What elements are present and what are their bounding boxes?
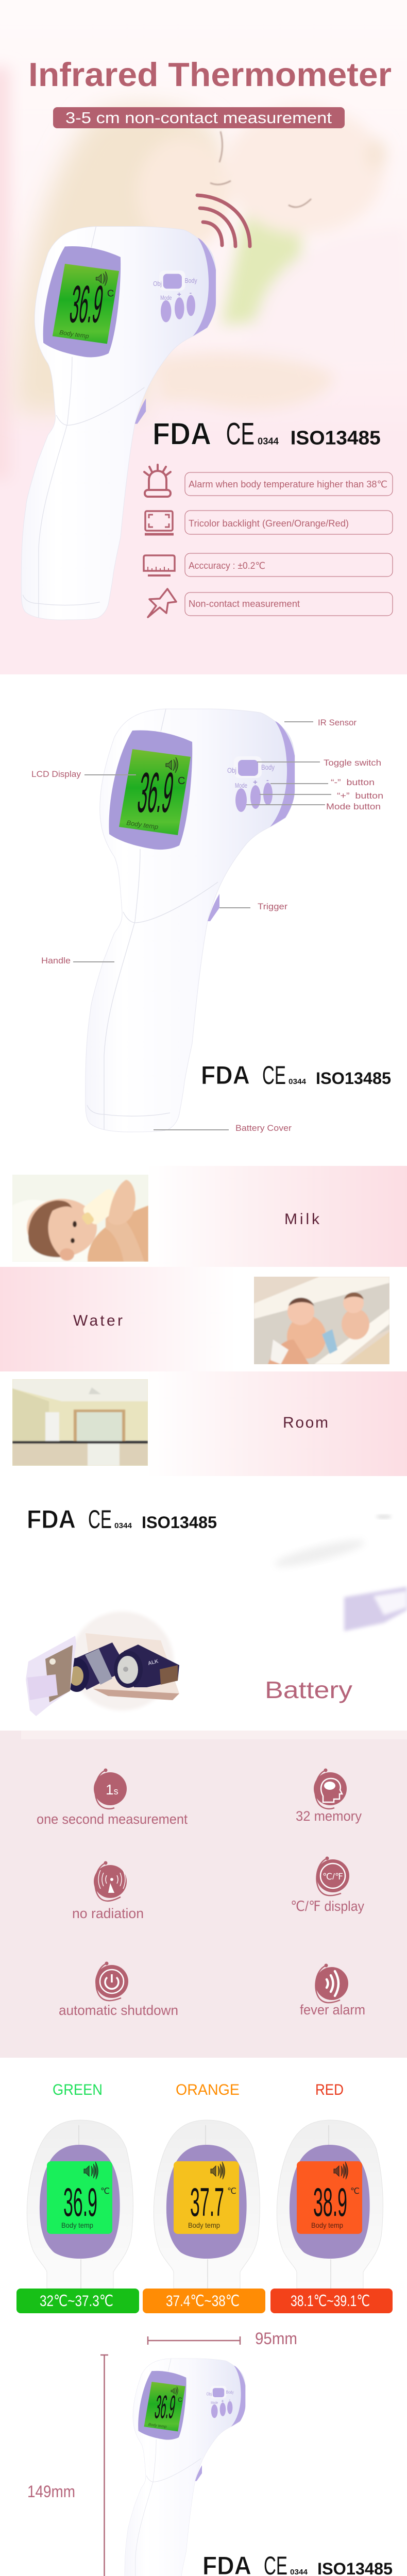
- certification logos: battery: FDA: [27, 1505, 76, 1534]
- panel: sample bands: [0, 1166, 407, 1476]
- label: Water: Water: [73, 1312, 123, 1329]
- thermometer: hero: +: [177, 290, 181, 298]
- range bar: red: 38.1℃~39.1℃: [291, 2293, 370, 2310]
- range bar: green: [16, 2289, 139, 2313]
- feature: non-contact: Non-contact measurement: [189, 599, 300, 609]
- photo: baby with bottle: [12, 1175, 148, 1262]
- range bar: orange: [143, 2289, 265, 2313]
- heading: GREEN: GREEN: [53, 2081, 103, 2098]
- feature: backlight: [185, 511, 393, 534]
- feature: no radiation: no radiation: [72, 1906, 144, 1921]
- icon: power: [95, 1962, 128, 2001]
- thermometer: orange screen: 37.7: [190, 2179, 224, 2225]
- battery: right: [114, 1645, 179, 1688]
- feature: automatic shutdown: automatic shutdown: [59, 2003, 178, 2018]
- label: LCD Display: LCD Display: [31, 769, 81, 779]
- thermometer: green screen: [27, 2120, 133, 2289]
- thermometer: main: Body: [261, 763, 275, 771]
- icon: unit toggle: [316, 1857, 349, 1895]
- certification logos: main: [201, 1061, 391, 1090]
- heading: ORANGE: ORANGE: [176, 2081, 240, 2098]
- dimension: 95mm: 95mm: [255, 2329, 297, 2348]
- feature: no radiation: [72, 1861, 144, 1921]
- thermometer: main: -: [266, 776, 269, 784]
- certification logos: battery: ISO13485: [142, 1513, 217, 1532]
- dimension: 95mm: [148, 2329, 297, 2348]
- thermometer: main: C: [178, 775, 185, 787]
- certification logos: dimensions: [202, 2551, 393, 2576]
- icon: radiation tower: [94, 1861, 127, 1901]
- thermometer: dimension view: 36.9: [153, 2388, 178, 2425]
- icon: pin: [148, 589, 176, 617]
- thermometer: main: Mode: [235, 782, 247, 789]
- thermometer: hero: Body temp: [59, 329, 90, 340]
- range bar: red: [270, 2289, 393, 2313]
- feature: automatic shutdown: [59, 1962, 178, 2018]
- thermometer: hero: Obj: [153, 280, 162, 287]
- thermometer: green screen: Body temp: [61, 2221, 93, 2229]
- feature: accuracy: Acccuracy : ±0.2℃: [189, 561, 265, 571]
- label: Milk: Milk: [284, 1211, 320, 1228]
- panel: room: [0, 1371, 407, 1476]
- subtitle pill: [53, 107, 345, 128]
- icon: alarm: [144, 465, 171, 497]
- thermometer: dimension view: Body temp: [148, 2422, 167, 2429]
- icon: 1s: 1s: [106, 1782, 118, 1798]
- feature: accuracy: [185, 553, 393, 577]
- label: IR Sensor: IR Sensor: [318, 718, 357, 727]
- certification logos: battery: 0344: [114, 1521, 132, 1530]
- feature: fever alarm: [300, 1964, 365, 2018]
- certification logos: main: 0344: [289, 1077, 307, 1086]
- certification logos: main: CE: [262, 1061, 286, 1090]
- label: Toggle switch: Toggle switch: [324, 758, 381, 768]
- thermometer: main: [86, 709, 295, 1132]
- certification logos: hero: CE: [226, 416, 255, 451]
- feature: fever alarm: fever alarm: [300, 2002, 365, 2018]
- feature: 32 memory: [296, 1768, 362, 1824]
- heading: RED: RED: [315, 2081, 344, 2098]
- panel: features: [0, 1731, 407, 2058]
- thermometer: dimension view: [125, 2359, 245, 2576]
- thermometer: main: 36.9: [134, 761, 177, 824]
- label: plus button: “+” button: [337, 791, 383, 801]
- certification logos: battery: FDA: [27, 1505, 76, 1534]
- thermometer: dimension view: Body: [226, 2390, 234, 2395]
- thermometer: hero: -: [190, 289, 192, 296]
- certification logos: hero: FDA: [152, 416, 211, 451]
- certification logos: battery: CE: [88, 1505, 112, 1534]
- dimension: 149mm: 149mm: [27, 2482, 75, 2501]
- panel: battery: [26, 1505, 407, 1716]
- label: Battery Cover: Battery Cover: [235, 1123, 292, 1133]
- feature: alarm: Alarm when body temperature higher than 38℃: [189, 479, 387, 489]
- hero photo: mother and baby: [15, 106, 407, 412]
- icon: signal waves: [197, 195, 250, 246]
- feature: one second measurement: [37, 1768, 188, 1827]
- label: Battery: Battery: [265, 1676, 352, 1703]
- thermometer: hero: Body: [185, 277, 197, 284]
- certification logos: hero: FDA: [152, 416, 211, 451]
- feature: backlight: Tricolor backlight (Green/Orange/Red): [189, 518, 349, 529]
- thermometer: main: Obj: [227, 766, 236, 774]
- certification logos: battery: [27, 1505, 217, 1534]
- title: Infrared Thermometer: [28, 56, 392, 93]
- panel: labelled thermometer: [31, 709, 391, 1133]
- thermometer: main: +: [253, 778, 258, 787]
- thermometer: hero: C: [107, 287, 114, 298]
- certification logos: hero: ISO13485: [291, 427, 381, 449]
- thermometer: hero: Mode: [160, 294, 172, 301]
- panel: water: [0, 1267, 407, 1371]
- thermometer: orange screen: [154, 2120, 260, 2289]
- thermometer: hero: 36.9: [66, 275, 107, 333]
- thermometer: red screen: ℃: [350, 2187, 360, 2196]
- thermometer: main: Body temp: [126, 819, 159, 831]
- certification logos: main: FDA: [201, 1061, 250, 1090]
- certification logos: hero: 0344: [258, 436, 279, 446]
- label: minus button: “-” button: [331, 777, 375, 787]
- certification logos: hero: [152, 416, 381, 451]
- icon: 1s: [94, 1768, 127, 1809]
- icon: screen: [145, 511, 174, 534]
- icon: memory head: [314, 1768, 347, 1809]
- feature: non-contact: [185, 592, 393, 616]
- panel: dimensions: [27, 2329, 393, 2576]
- thermometer: dimension view: Obj: [207, 2392, 212, 2397]
- label: Trigger: Trigger: [258, 902, 287, 911]
- panel: backlight colours: [16, 2081, 393, 2313]
- thermometer: orange screen: Body temp: [188, 2221, 220, 2229]
- certification logos: main: ISO13485: [316, 1069, 391, 1088]
- icon: sound waves: [315, 1964, 348, 2003]
- thermometer: dimension view: C: [178, 2397, 182, 2403]
- subtitle pill: 3-5 cm non-contact measurement: [65, 109, 332, 127]
- icon: unit toggle: ℃/℉: [323, 1872, 343, 1882]
- blurred thermometer background: [273, 1515, 407, 1631]
- range bar: orange: 37.4℃~38℃: [166, 2293, 240, 2310]
- thermometer: dimension view: +: [222, 2398, 224, 2403]
- photo: empty room: [12, 1379, 148, 1466]
- certification logos: main: FDA: [201, 1061, 250, 1090]
- thermometer: red screen: [277, 2120, 383, 2289]
- thermometer: hero: [21, 226, 216, 620]
- photo: children in bath: [254, 1277, 389, 1364]
- battery: left: [64, 1642, 128, 1692]
- icon: ruler: [144, 555, 175, 575]
- battery cover: [26, 1636, 76, 1716]
- thermometer: red screen: 38.9: [313, 2179, 347, 2225]
- battery: right: ALK: [147, 1658, 159, 1667]
- thermometer: green screen: ℃: [100, 2187, 110, 2196]
- label: Mode button: Mode button: [326, 802, 381, 811]
- label: Handle: Handle: [41, 956, 71, 965]
- panel: hero: [0, 56, 407, 674]
- label: Trigger: [219, 902, 287, 911]
- thermometer: green screen: 36.9: [63, 2179, 97, 2225]
- feature: alarm: [185, 472, 393, 496]
- feature: 32 memory: 32 memory: [296, 1808, 362, 1824]
- thermometer: dimension view: Mode: [211, 2400, 218, 2405]
- label: Room: Room: [283, 1414, 328, 1431]
- thermometer: orange screen: ℃: [227, 2187, 236, 2196]
- battery compartment: [64, 1612, 179, 1710]
- feature: one second measurement: one second measurement: [37, 1811, 188, 1827]
- thermometer: red screen: Body temp: [311, 2221, 343, 2229]
- range bar: green: 32℃~37.3℃: [40, 2293, 113, 2310]
- feature: unit display: ℃/℉ display: [291, 1899, 364, 1914]
- panel: milk: [0, 1166, 407, 1267]
- feature: unit display: [291, 1857, 364, 1914]
- dimension: 149mm: [27, 2355, 108, 2576]
- thermometer: dimension view: -: [229, 2397, 231, 2402]
